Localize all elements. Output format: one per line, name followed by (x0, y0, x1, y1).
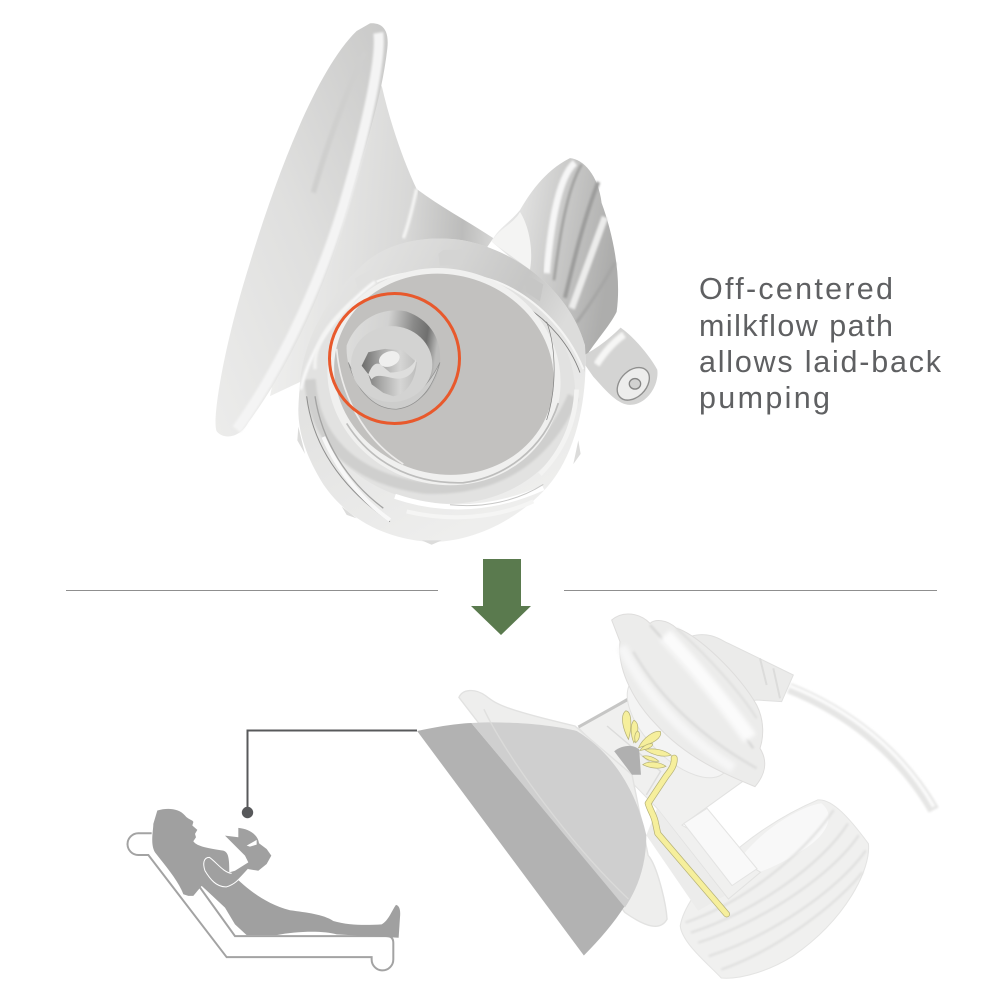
flange (459, 691, 667, 926)
woman silhouette (152, 809, 400, 938)
off-center outlet (347, 310, 440, 409)
pump highlight (247, 840, 257, 847)
leader line (248, 730, 417, 812)
thread knobs (297, 427, 581, 545)
caption: allows laid-back (699, 345, 942, 379)
lounge chair (127, 833, 393, 970)
thread lines (307, 396, 390, 522)
arrow down (471, 559, 531, 635)
tubing (789, 686, 934, 810)
caption (699, 272, 942, 415)
arm outline (204, 857, 248, 887)
milk channel (648, 758, 727, 914)
caption: Off-centered (699, 272, 893, 306)
milk spray (622, 711, 671, 768)
diaphragm (610, 614, 793, 795)
inner disc (303, 242, 585, 512)
product: breast shield, top view (216, 23, 657, 545)
air port nozzle (580, 328, 657, 407)
nipple (614, 746, 641, 775)
rear dome and port (690, 635, 793, 702)
caption: milkflow path (699, 309, 893, 343)
membrane (612, 614, 765, 787)
flange inner ring line (484, 709, 628, 899)
bottle collar (680, 800, 869, 978)
breast section (417, 723, 625, 955)
breast through dome (471, 722, 646, 907)
leader dot (242, 807, 253, 818)
inner wall (288, 247, 594, 525)
divider right (564, 590, 937, 591)
caption: pumping (699, 381, 830, 415)
collar body (298, 239, 586, 542)
highlight circle (330, 294, 460, 424)
top rim band (299, 239, 585, 396)
lower dome (610, 658, 747, 795)
divider left (66, 590, 438, 591)
rim lugs (438, 250, 463, 266)
funnel cone (270, 85, 493, 396)
threaded collar (288, 239, 594, 545)
pump cross-section (417, 614, 934, 978)
stem (578, 697, 761, 911)
reclining woman illustration (127, 809, 400, 970)
diaphragm housing (492, 158, 618, 361)
flange rim and face (216, 23, 388, 436)
